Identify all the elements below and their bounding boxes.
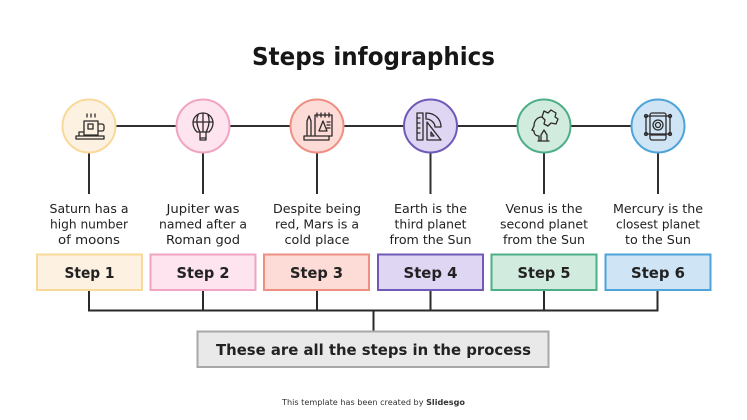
step 1 box: Step 1	[64, 264, 114, 282]
connector: bottom bracket	[89, 290, 658, 331]
text: Jupiter: Roman god	[166, 232, 240, 247]
step 3 box	[264, 254, 369, 290]
step 4 box: Step 4	[404, 264, 458, 282]
text: Venus	[500, 201, 588, 247]
text: Mars: Despite being	[273, 201, 361, 216]
step 4 circle icon: set squares	[404, 100, 457, 152]
text: Mercury: closest planet	[616, 216, 700, 232]
text: Saturn: Saturn has a	[50, 201, 128, 216]
text: Earth: Earth is the	[394, 201, 467, 216]
step 3 circle icon: notebook and ruler	[290, 100, 344, 152]
step 3 box: Step 3	[290, 264, 343, 282]
text: Mercury: Mercury is the	[613, 201, 703, 216]
step 5 circle icon: head with puzzle	[518, 100, 570, 152]
text: Saturn: of moons	[58, 232, 120, 247]
text: Mercury: to the Sun	[625, 232, 691, 247]
text: Venus: from the Sun	[503, 232, 585, 247]
summary box	[198, 332, 548, 367]
title: Steps infographics	[252, 42, 495, 71]
connector: top timeline line	[89, 126, 658, 194]
step 6 circle icon: phone with gear	[632, 100, 684, 152]
step 1 box	[37, 254, 142, 290]
step 5 box: Step 5	[518, 264, 570, 282]
text: Saturn	[50, 201, 129, 247]
text: Saturn: high number	[50, 216, 129, 232]
step 5 box	[492, 254, 596, 290]
text: Jupiter: named after a	[159, 216, 247, 232]
text: Earth: from the Sun	[390, 232, 472, 247]
text: Venus: Venus is the	[506, 201, 583, 216]
step 2 circle icon: hot air balloon	[176, 100, 230, 152]
text: Mars: red, Mars is a	[275, 216, 359, 232]
step 2 box: Step 2	[176, 264, 230, 282]
text: Earth	[390, 201, 472, 247]
summary box: These are all the steps in the process	[216, 341, 531, 359]
step 2 box	[150, 254, 256, 290]
text: Venus: second planet	[500, 216, 588, 232]
step 6 box	[606, 254, 710, 290]
text: Jupiter	[159, 201, 247, 247]
text: Earth: third planet	[394, 216, 467, 232]
footer credit: This template has been created by Slidesgo	[281, 398, 465, 407]
step 1 circle icon: cup	[62, 100, 116, 152]
text: Jupiter: Jupiter was	[165, 201, 240, 216]
step 4 box	[378, 254, 483, 290]
text: Mercury	[613, 201, 703, 247]
text: Mars: cold place	[284, 232, 350, 247]
step 6 box: Step 6	[631, 264, 685, 282]
text: Mars	[273, 201, 361, 247]
